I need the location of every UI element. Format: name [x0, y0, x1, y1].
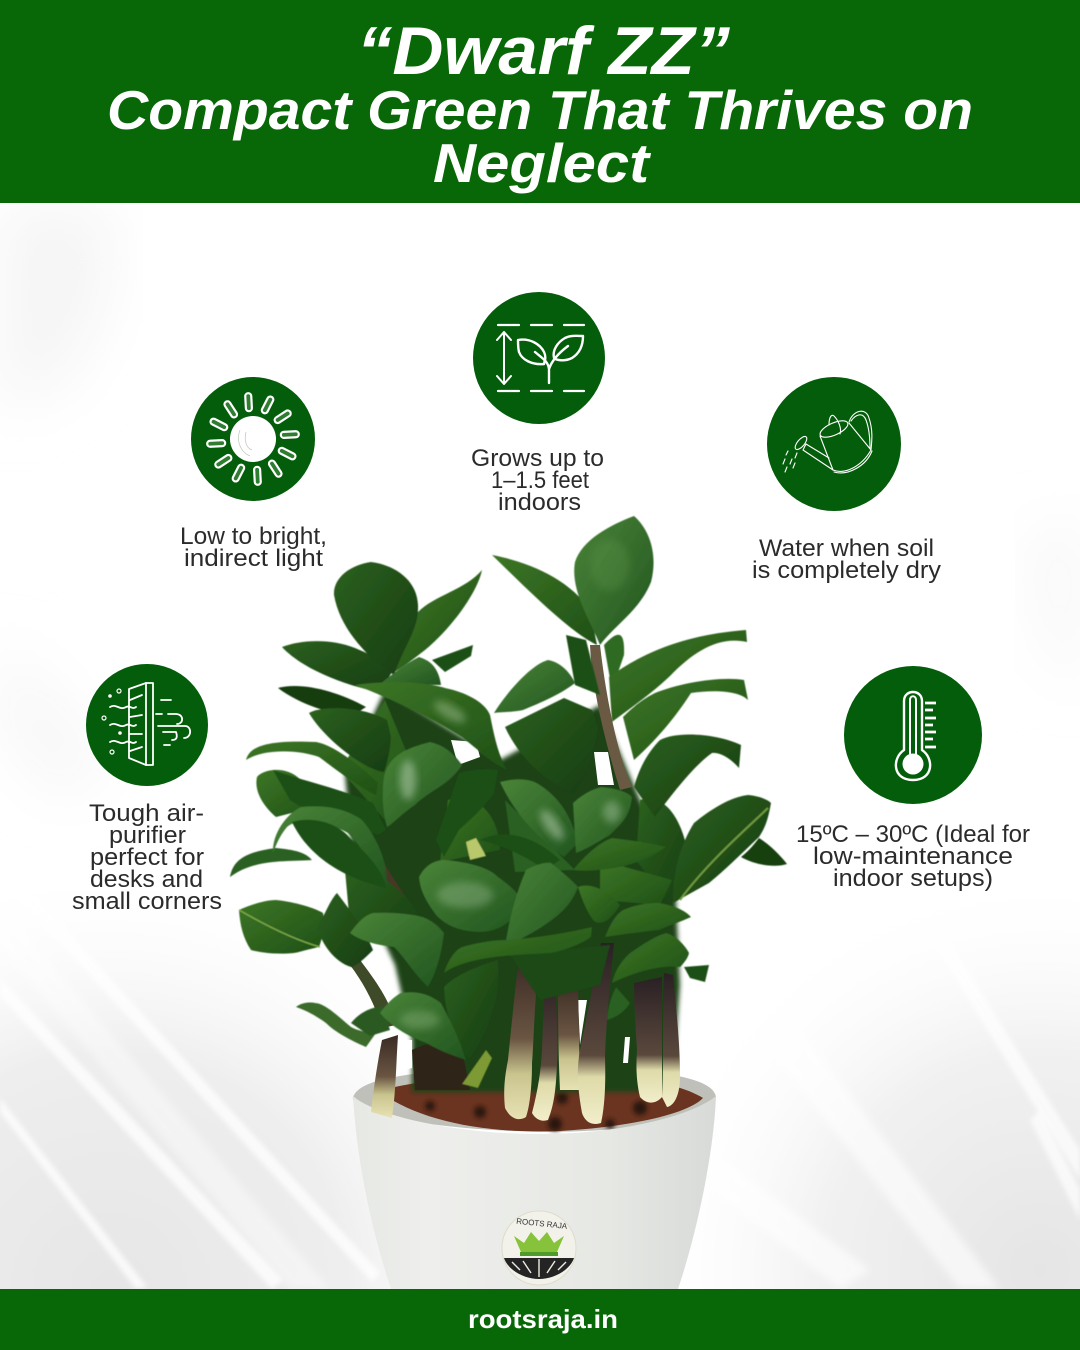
icon: thermometer: [844, 666, 982, 804]
label: temperature: indoor setups): [833, 865, 993, 892]
label: temperature: low-maintenance: [813, 843, 1013, 870]
label: air: Tough air-: [89, 800, 204, 827]
header bar: [0, 0, 1080, 203]
dark interior mass: [345, 690, 680, 1092]
website: rootsraja.in: [468, 1304, 618, 1334]
label: air: desks and: [90, 866, 203, 893]
plant in white pot: [230, 516, 787, 1289]
title: [107, 13, 973, 194]
leaf highlights: [590, 539, 630, 591]
label: air: perfect for: [90, 844, 204, 871]
footer bar: [0, 1289, 1080, 1350]
leaves: middle centre and right: [500, 779, 578, 857]
pot logo: ROOTS RAJA: [516, 1217, 568, 1231]
icon: sun: [191, 377, 315, 501]
leaves: middle left cascade: [309, 708, 391, 772]
label: air: small corners: [72, 888, 222, 915]
label: temperature: [796, 821, 1030, 892]
title: Compact Green That Thrives on: [107, 79, 973, 141]
soil: [380, 1076, 703, 1131]
pot logo: [502, 1211, 576, 1285]
label: height: indoors: [498, 489, 581, 516]
pot body: [353, 1096, 716, 1289]
icon: plant height: [473, 292, 605, 424]
label: light: indirect light: [184, 545, 323, 572]
label: height: Grows up to: [471, 445, 604, 472]
label: temperature: 15ºC – 30ºC (Ideal for: [796, 821, 1030, 848]
icon: watering can: [767, 377, 901, 511]
label: light: Low to bright,: [180, 523, 327, 550]
title: “Dwarf ZZ”: [357, 13, 730, 89]
icon: air purifier: [86, 664, 208, 786]
leaves: lower tier: [419, 860, 523, 932]
label: light: [180, 523, 327, 572]
title: Neglect: [433, 132, 652, 194]
label: water: [752, 535, 941, 584]
label: height: 1–1.5 feet: [491, 467, 589, 494]
leaves: upper left crown: [741, 838, 787, 866]
pot rim back: [353, 1073, 716, 1132]
label: water: Water when soil: [759, 535, 934, 562]
stems: [371, 1035, 398, 1118]
label: air: purifier: [109, 822, 186, 849]
label: air: [72, 800, 222, 915]
leaves: filler behind the crown: [636, 798, 690, 905]
label: water: is completely dry: [752, 557, 941, 584]
leaves: upper right crown: [492, 555, 597, 645]
white gaps: [451, 740, 614, 785]
leaves: [230, 516, 787, 1088]
label: height: [471, 445, 604, 516]
